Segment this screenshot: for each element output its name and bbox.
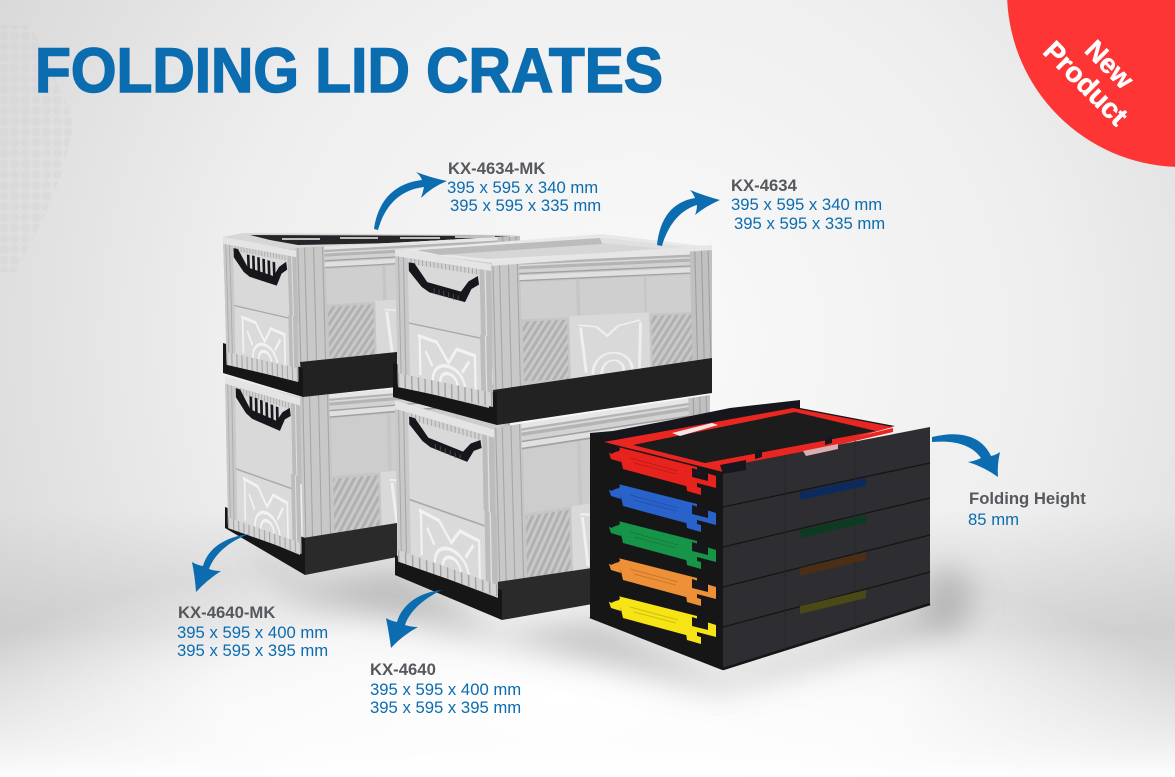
label: KX-4640: 395 x 595 x 395 mm <box>370 698 521 717</box>
label: KX-4634: 395 x 595 x 335 mm <box>734 214 885 233</box>
label: KX-4640-MK: KX-4640-MK <box>178 603 275 622</box>
label: KX-4634-MK: 395 x 595 x 340 mm <box>447 178 598 197</box>
label: KX-4640-MK: 395 x 595 x 400 mm <box>177 623 328 642</box>
orange lid <box>607 557 716 606</box>
badge: new product <box>1007 0 1175 167</box>
label: KX-4634: KX-4634 <box>731 176 798 195</box>
stack end face <box>590 433 723 670</box>
crate: KX-4640-MK <box>225 376 528 575</box>
badge: new product: New <box>1079 34 1140 96</box>
stack slots <box>800 478 866 614</box>
arrow: KX-4634-MK <box>374 172 447 230</box>
label: KX-4634-MK: 395 x 595 x 335 mm <box>450 196 601 215</box>
label: KX-4640-MK: 395 x 595 x 395 mm <box>177 641 328 660</box>
label: KX-4640: 395 x 595 x 400 mm <box>370 680 521 699</box>
folded crate stack <box>590 400 930 670</box>
floor shadows <box>232 530 972 690</box>
yellow lid <box>607 595 716 644</box>
label: KX-4634: 395 x 595 x 340 mm <box>731 195 882 214</box>
label: KX-4634-MK <box>447 159 601 215</box>
label: folding height <box>968 489 1086 529</box>
label: KX-4634-MK: KX-4634-MK <box>448 159 545 178</box>
label: KX-4634 <box>731 176 885 233</box>
lid top <box>590 400 895 475</box>
red lid <box>607 446 716 495</box>
green lid <box>607 520 716 569</box>
label: KX-4640-MK <box>177 603 328 660</box>
label: KX-4640 <box>370 660 521 717</box>
title: FOLDING LID CRATES <box>35 36 663 106</box>
arrow: KX-4640 <box>386 590 442 648</box>
arrow: KX-4634 <box>657 190 720 246</box>
label: KX-4640: KX-4640 <box>370 660 436 679</box>
crate: KX-4634-MK <box>223 233 523 397</box>
label: folding height: Folding Height <box>969 489 1086 508</box>
arrow: KX-4640-MK <box>192 534 249 592</box>
arrow: folding height <box>932 434 1000 477</box>
crate: KX-4634 <box>393 234 715 425</box>
stack long side <box>723 427 930 670</box>
label: folding height: 85 mm <box>968 510 1019 529</box>
blue lid <box>607 483 716 532</box>
badge: new product: Product <box>1037 35 1134 132</box>
crate: KX-4640 <box>395 395 715 620</box>
